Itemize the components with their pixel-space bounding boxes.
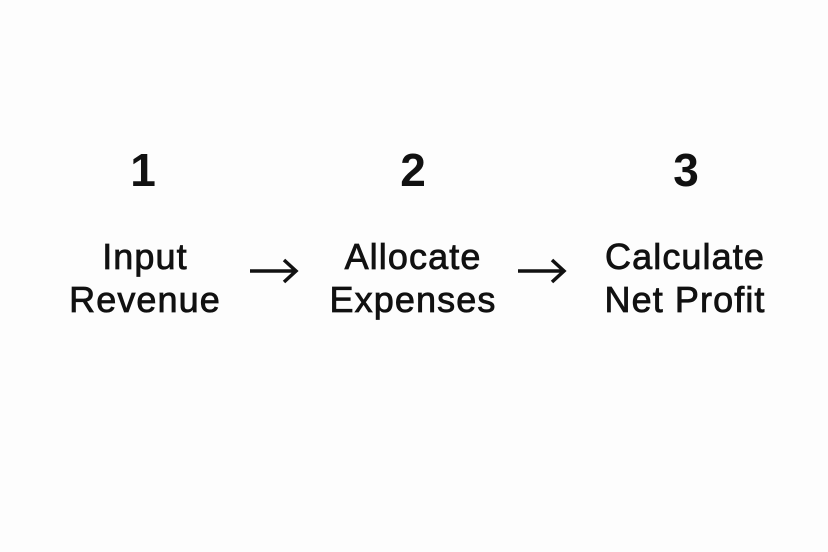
step 3 label — [604, 236, 766, 320]
step 1 number: 1 — [130, 144, 156, 196]
step 2 label: Expenses — [330, 279, 496, 320]
step 3 label: Net Profit — [604, 279, 766, 320]
step 2 label: Allocate — [345, 236, 481, 277]
arrow 2 — [518, 258, 566, 284]
step 3 label: Calculate — [605, 236, 765, 277]
step 1 label: Revenue — [69, 279, 221, 320]
step 3 number: 3 — [673, 144, 699, 196]
step 1 label: Input — [102, 236, 188, 277]
arrow 1 — [250, 258, 298, 284]
step 2 number: 2 — [400, 144, 426, 196]
step 2 label — [330, 236, 496, 320]
step 1 label — [69, 236, 221, 320]
